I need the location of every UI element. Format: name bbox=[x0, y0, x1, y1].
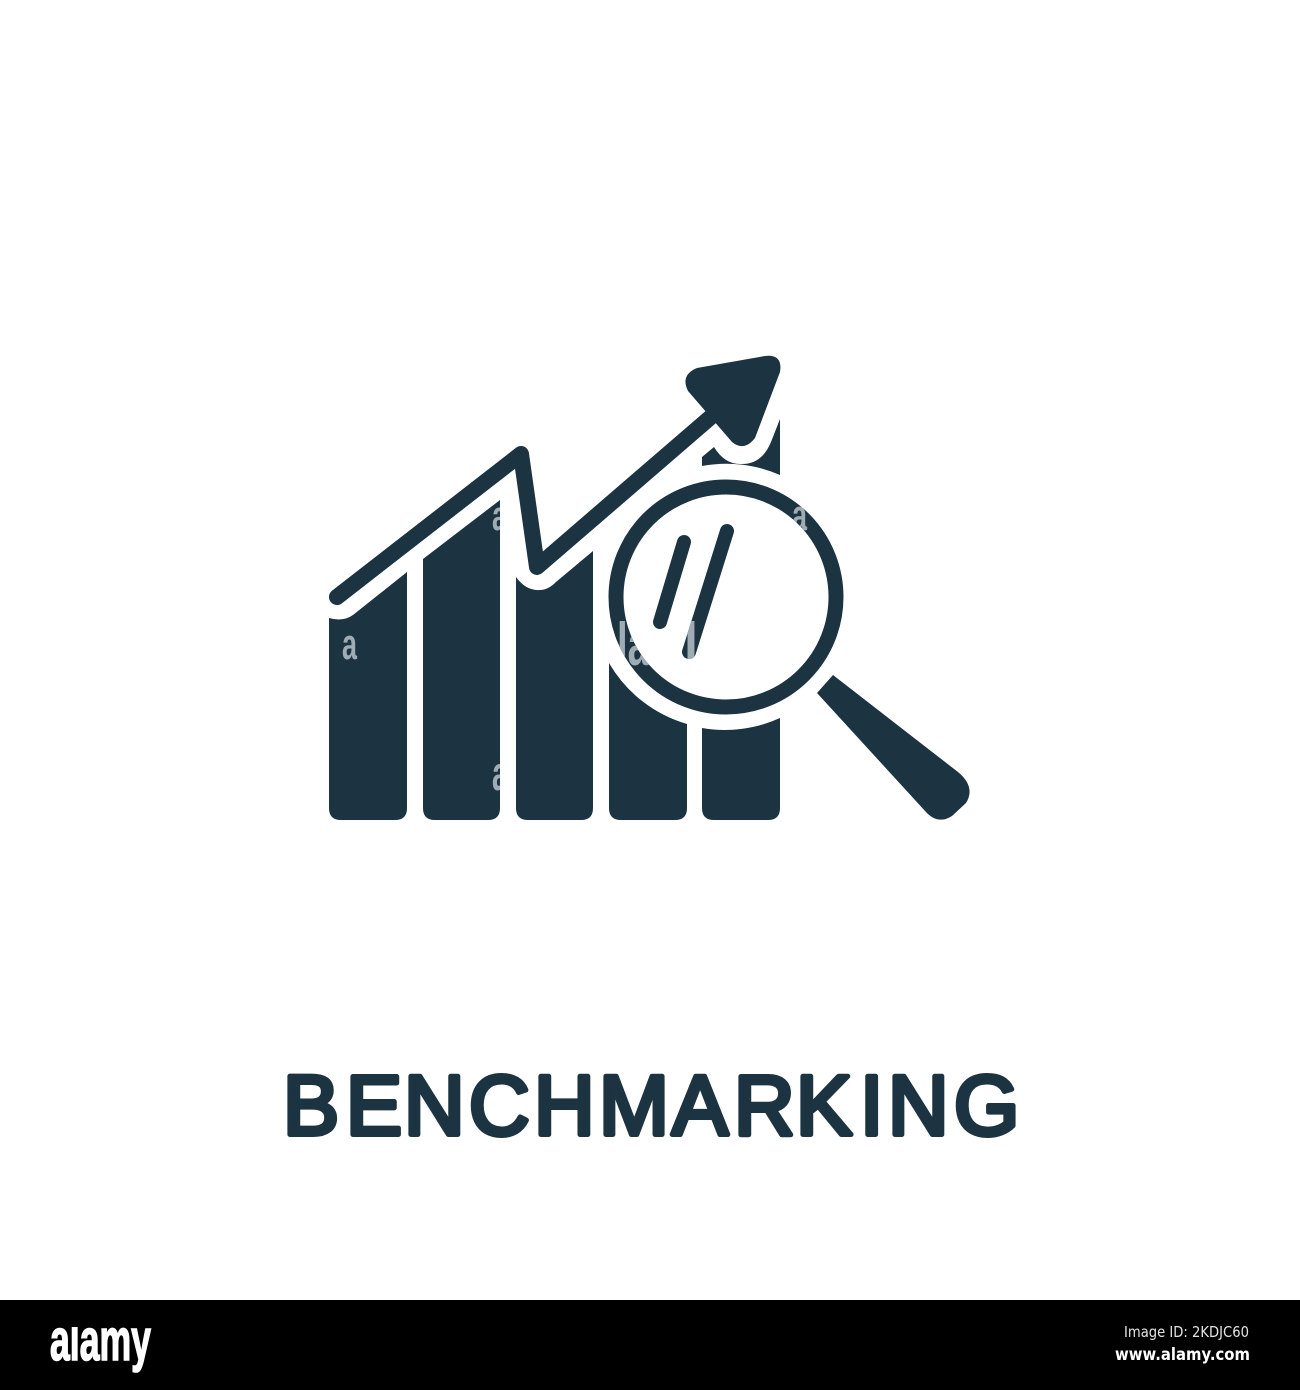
website: www.alamy.com bbox=[1115, 1345, 1250, 1365]
watermark fragments: l bbox=[684, 611, 698, 678]
icon: benchmarking chart with magnifier bbox=[329, 356, 970, 820]
icon: magnifying glass bbox=[616, 487, 970, 820]
watermark fragments: a bbox=[342, 620, 357, 669]
watermark fragments: a bbox=[792, 491, 807, 540]
logo: alamy: alamy bbox=[50, 1308, 151, 1373]
bar chart bbox=[329, 419, 780, 820]
title: BENCHMARKING bbox=[283, 1058, 1019, 1152]
watermark fragments: a bbox=[492, 748, 508, 801]
arrow: rising trend line bbox=[337, 356, 780, 597]
watermark fragments bbox=[342, 491, 807, 801]
watermark fragments: a bbox=[492, 492, 507, 539]
footer bar bbox=[0, 1300, 1300, 1390]
image id: Image ID: 2KDJC60 bbox=[1124, 1323, 1249, 1341]
watermark fragments: la bbox=[617, 611, 649, 678]
